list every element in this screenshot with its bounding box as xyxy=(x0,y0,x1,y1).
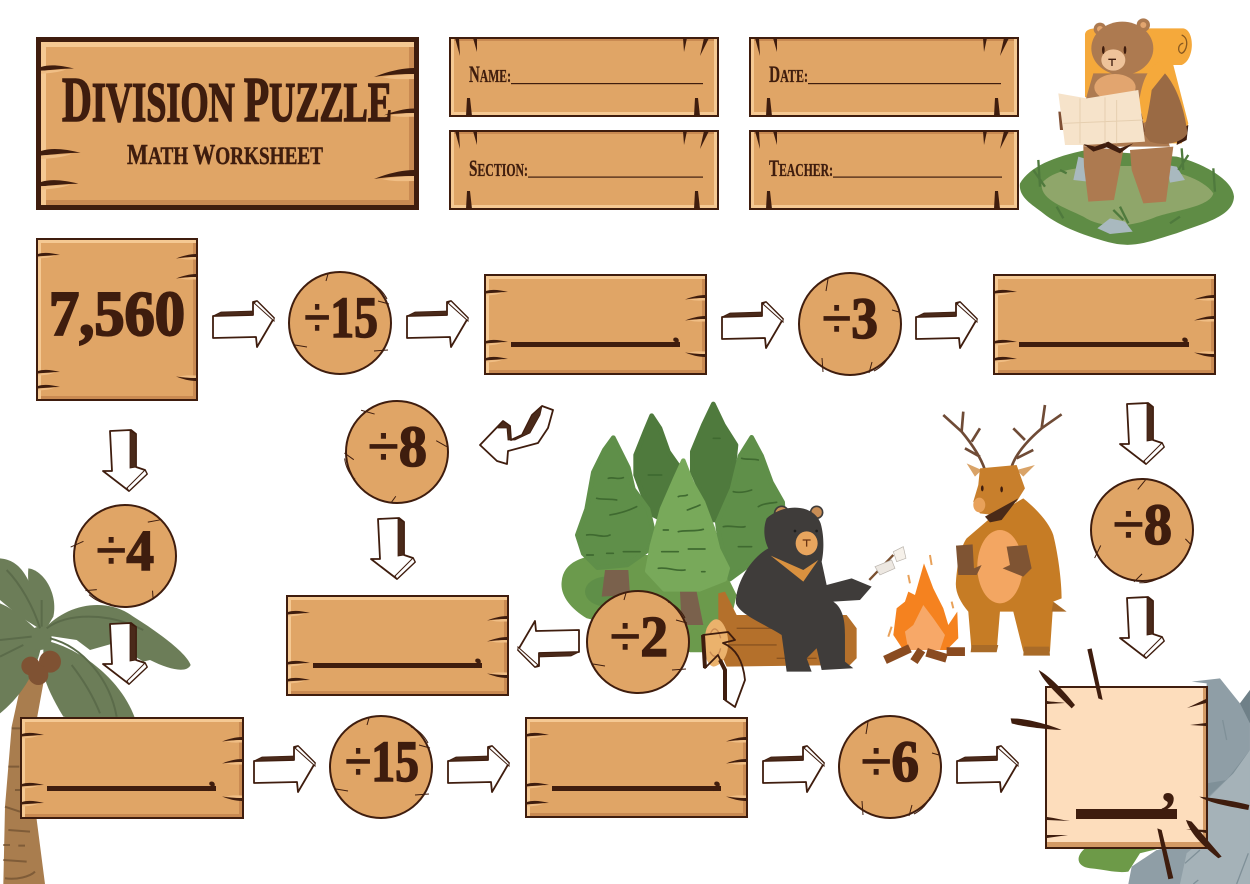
illustration: black bear sitting on a log xyxy=(704,506,906,672)
section field xyxy=(449,130,719,210)
teacher field xyxy=(749,130,1019,210)
answer box 5 xyxy=(525,717,748,818)
arrow: right 2 xyxy=(407,301,468,347)
division circle ÷6 xyxy=(839,716,941,818)
arrow: curved toward ÷8 xyxy=(480,406,553,464)
arrow: right 3 xyxy=(722,302,783,348)
illustration: palm tree xyxy=(0,558,191,884)
answer box 4: , xyxy=(208,757,216,793)
teacher field: TEACHER: xyxy=(769,156,833,181)
arrow: curved up to ÷2 xyxy=(703,632,745,707)
marshmallow on a stick xyxy=(869,547,906,580)
division circle ÷8 left: ÷8 xyxy=(368,414,427,479)
division circle ÷2 xyxy=(587,591,689,693)
answer box 1 xyxy=(484,274,707,375)
illustration: campfire xyxy=(885,555,965,662)
burst marks xyxy=(1011,648,1249,879)
arrow: down from ÷8 right xyxy=(1120,597,1164,658)
illustration: forest xyxy=(561,404,784,652)
final answer box xyxy=(1011,648,1249,879)
answer box 3: , xyxy=(474,634,482,670)
arrow: right bottom 1 xyxy=(254,746,315,792)
division circle ÷2: ÷2 xyxy=(610,604,668,669)
division circle ÷15 top xyxy=(289,272,391,374)
date field xyxy=(749,37,1019,117)
subheading: MATH WORKSHEET xyxy=(127,139,323,171)
division circle ÷8 left xyxy=(334,401,449,513)
division circle ÷3: ÷3 xyxy=(822,286,878,351)
answer box 1: , xyxy=(672,313,680,349)
start value plank: 7,560 xyxy=(49,278,185,349)
division circle ÷8 right xyxy=(1091,477,1207,597)
arrow: right 1 xyxy=(213,301,274,347)
name field: NAME: xyxy=(469,62,511,87)
arrow: down from ÷8 left xyxy=(371,518,415,579)
division circle ÷4: ÷4 xyxy=(96,518,154,583)
answer box 4 xyxy=(20,717,244,819)
log xyxy=(704,592,857,667)
answer box 2: , xyxy=(1181,313,1189,349)
illustration: deer xyxy=(943,405,1067,656)
start value plank xyxy=(36,238,198,401)
heading: DIVISION PUZZLE xyxy=(62,64,392,135)
arrow: down from start xyxy=(103,430,147,491)
bear body xyxy=(736,506,872,672)
answer box 3 xyxy=(286,595,509,696)
final answer box: , xyxy=(1161,749,1176,815)
arrow: down from ÷4 xyxy=(103,623,147,684)
arrow: right bottom 3 xyxy=(763,746,824,792)
division circle ÷8 right: ÷8 xyxy=(1113,492,1172,557)
name field xyxy=(449,37,719,117)
answer box 5: , xyxy=(713,757,721,793)
division circle ÷4 xyxy=(69,505,184,619)
division circle ÷15 top: ÷15 xyxy=(304,285,378,350)
arrow: right 4 xyxy=(916,302,977,348)
division circle ÷6: ÷6 xyxy=(861,729,919,794)
arrow: right bottom 4 xyxy=(957,746,1018,792)
division circle ÷15 bottom: ÷15 xyxy=(345,729,419,794)
illustration: bear with backpack and map xyxy=(1020,18,1234,245)
arrow: down from box 2 xyxy=(1120,403,1164,464)
illustration: rock and bush behind the final box xyxy=(1079,678,1250,884)
division circle ÷3 xyxy=(799,273,901,375)
division circle ÷15 bottom xyxy=(330,716,432,818)
arrow: left to box 3 xyxy=(518,621,579,667)
answer box 2 xyxy=(993,274,1216,375)
date field: DATE: xyxy=(769,62,808,87)
section field: SECTION: xyxy=(469,156,528,181)
arrow: right bottom 2 xyxy=(448,746,509,792)
title plank xyxy=(36,37,419,210)
